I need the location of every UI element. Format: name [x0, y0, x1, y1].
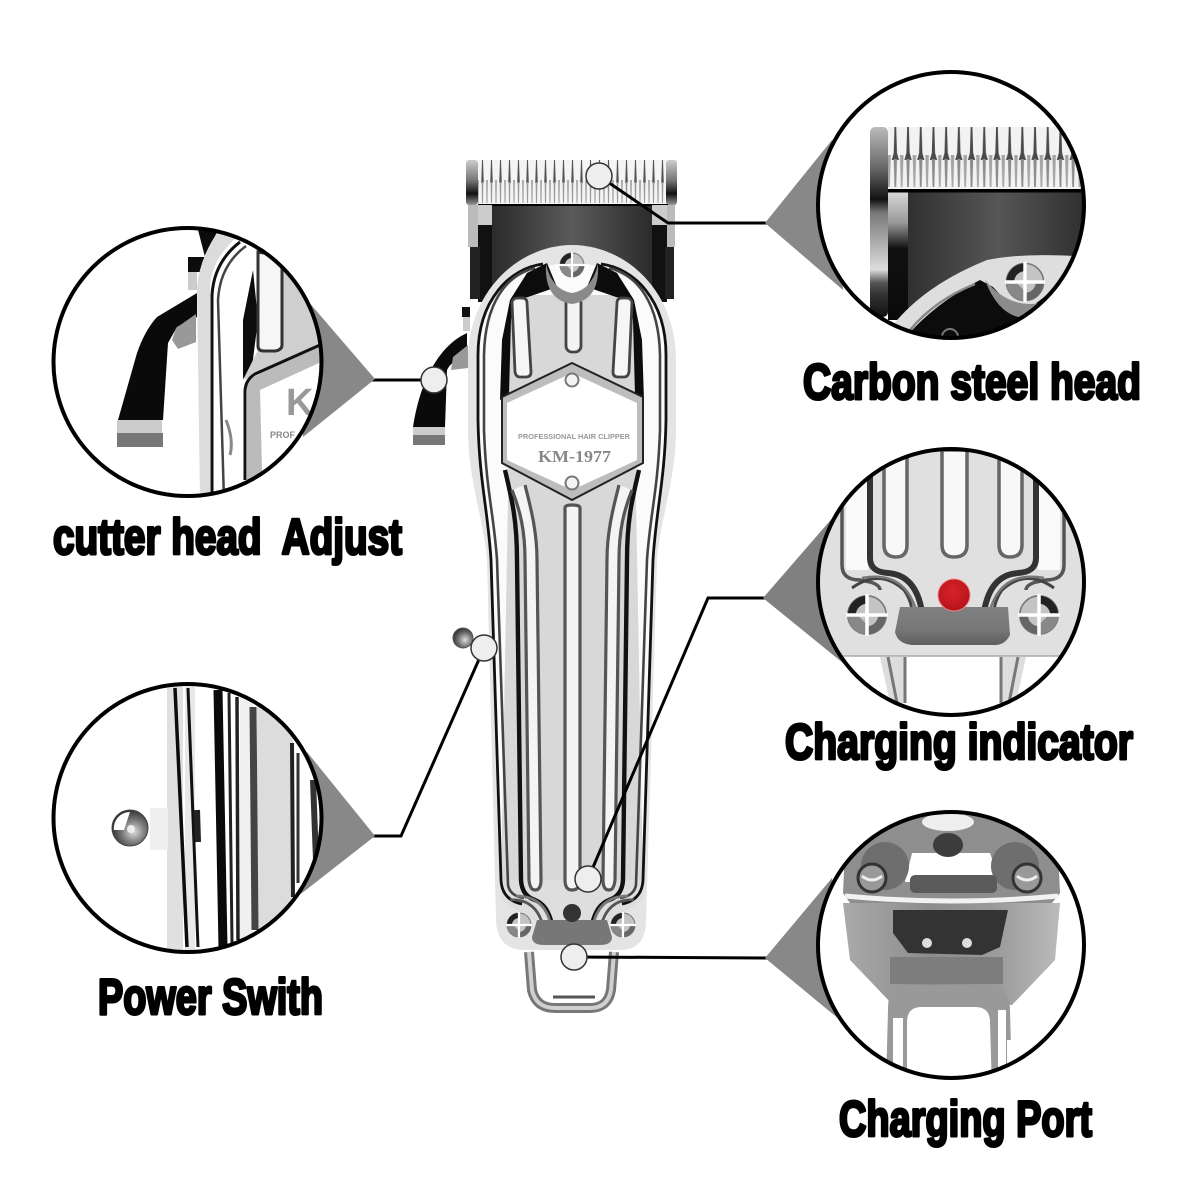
blade side posts: [466, 160, 677, 205]
inset: charging port: [818, 812, 1084, 1090]
marker: blade: [586, 163, 612, 189]
inset: power switch: [54, 684, 322, 954]
blade teeth: [478, 160, 668, 204]
leader line: charging indicator: [588, 598, 770, 879]
leader line: power switch: [370, 648, 484, 836]
body shell: [468, 245, 676, 950]
inset: charging indicator: [815, 449, 1090, 715]
hex badge: KM-1977: [538, 447, 612, 466]
hex badge: [502, 363, 643, 500]
charging notch and indicator hole: [506, 904, 636, 945]
marker: indicator: [575, 866, 601, 892]
power button: [453, 628, 473, 648]
leader line: carbon steel head: [599, 176, 770, 223]
inset: cutter head adjust: K: [286, 382, 314, 424]
marker: port: [561, 944, 587, 970]
label: cutter head adjust: cutter head Adjust: [53, 509, 402, 565]
clipper illustration: [413, 160, 677, 1008]
hex badge: PROFESSIONAL HAIR CLIPPER: [518, 432, 631, 441]
marker: lever: [421, 367, 447, 393]
hanging loop: [529, 952, 614, 1008]
callout pointer: cutter head adjust: [303, 300, 375, 437]
switch knob: [112, 810, 148, 846]
top screw: [546, 252, 598, 304]
red indicator light: [938, 579, 970, 611]
dark head block: [492, 205, 652, 295]
label: charging port: Charging Port: [839, 1091, 1092, 1147]
inset: cutter head adjust: PROF: [270, 430, 296, 440]
callout pointer: charging indicator: [763, 515, 843, 663]
inset: carbon steel head: [818, 72, 1090, 345]
leader line: cutter head adjust: [370, 378, 434, 382]
callout pointer: carbon steel head: [765, 140, 843, 290]
callout pointer: charging port: [765, 878, 840, 1020]
adjustment lever: [413, 307, 470, 445]
label: power switch: Power Swith: [98, 969, 323, 1025]
leader line: charging port: [574, 957, 770, 958]
inset: cutter head adjust: [54, 226, 340, 500]
callout pointer: power switch: [297, 752, 375, 897]
marker: power switch: [471, 635, 497, 661]
